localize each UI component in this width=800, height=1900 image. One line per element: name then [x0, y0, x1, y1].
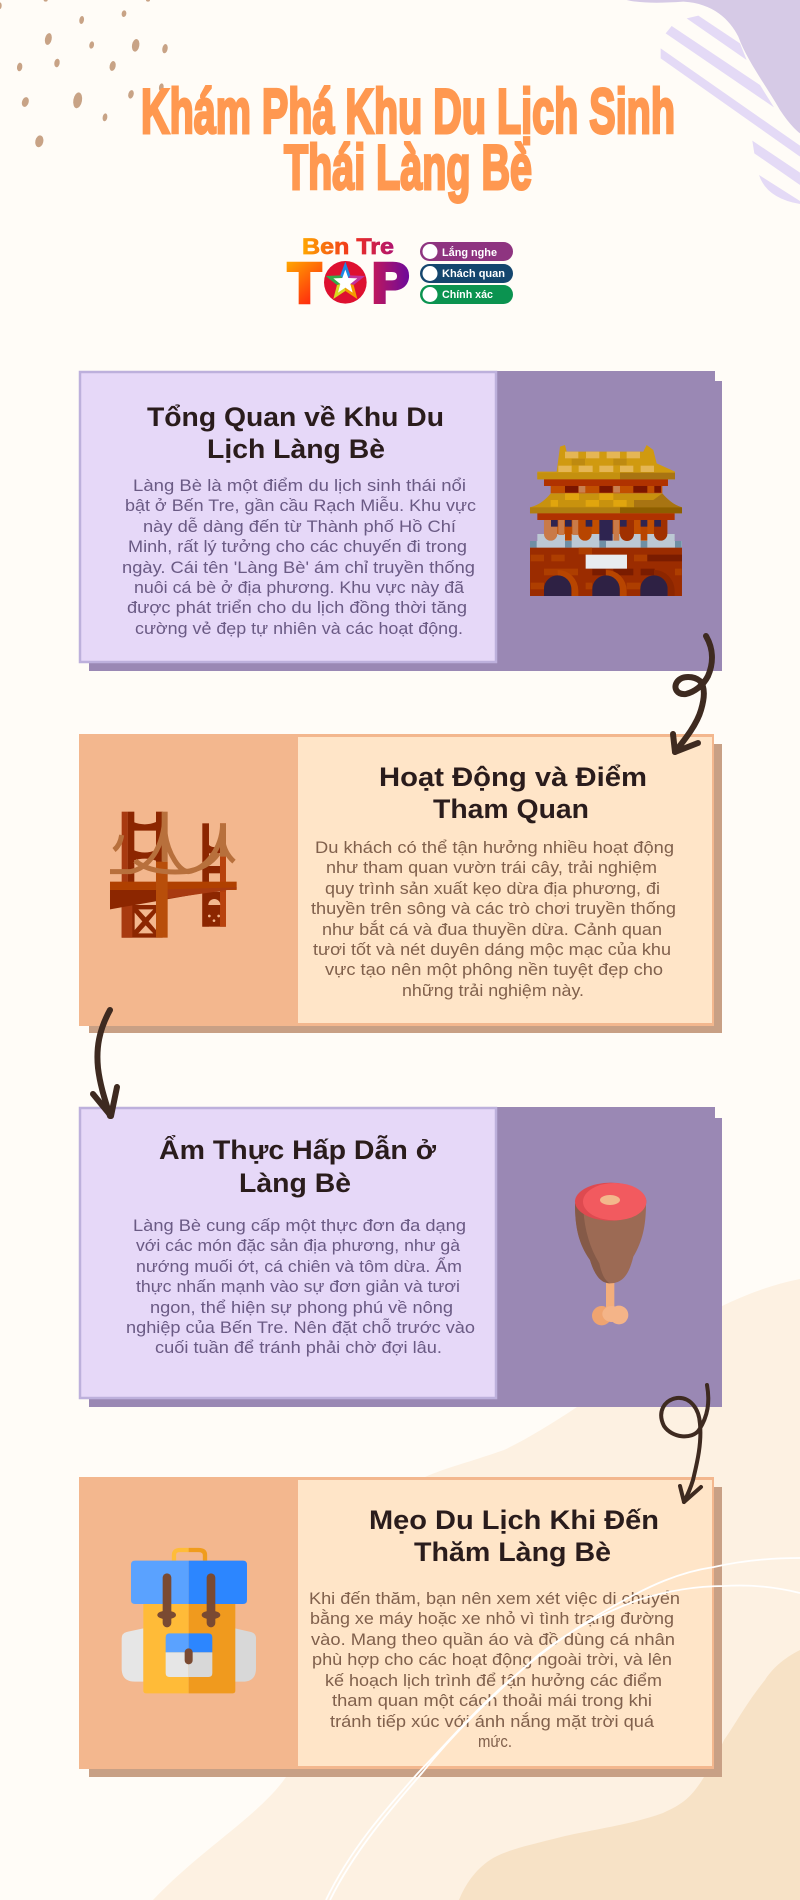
heading: Làng Bè — [239, 1168, 351, 1198]
text block: được phát triển cho du lịch đồng thời tăng — [127, 598, 467, 617]
heading — [159, 1134, 437, 1198]
icon: temple — [530, 445, 682, 596]
arrow: activities to cuisine — [93, 1010, 117, 1116]
arrow: overview to activities — [673, 636, 712, 752]
panel background — [79, 371, 722, 671]
text block: tránh tiếp xúc với ánh nắng mặt trời quá — [330, 1712, 655, 1731]
logo pill: Lắng nghe: Lắng nghe — [442, 246, 497, 259]
decoration: purple blob with stripes — [627, 0, 800, 204]
text block: như tham quan vườn trái cây, trải nghiệm — [326, 858, 657, 877]
panel: cuisine — [79, 1107, 722, 1407]
decoration: tan wave — [459, 1650, 800, 1900]
logo letter P: P — [372, 251, 409, 314]
text block: Làng Bè cung cấp một thực đơn đa dạng — [133, 1216, 466, 1235]
text block: Minh, rất lý tưởng cho các chuyến đi trong — [128, 537, 467, 556]
title: Thái Làng Bè — [284, 133, 532, 203]
text block: Du khách có thể tận hưởng nhiều hoạt động — [315, 838, 674, 857]
arrow: cuisine to tips — [661, 1385, 708, 1502]
panel background — [79, 734, 722, 1033]
text block: quy trình sản xuất kẹo dừa địa phương, đi — [325, 879, 660, 898]
text block: bật ở Bến Tre, gần cầu Rạch Miễu. Khu vực — [125, 496, 477, 515]
text block: mức. — [478, 1732, 512, 1751]
icon: bridge — [110, 812, 237, 938]
text block: với các món đặc sản địa phương, như gà — [136, 1236, 461, 1255]
heading: Ẩm Thực Hấp Dẫn ở — [159, 1134, 437, 1165]
heading — [379, 762, 647, 824]
heading — [369, 1505, 659, 1567]
heading: Thăm Làng Bè — [414, 1537, 611, 1567]
text block: Làng Bè là một điểm du lịch sinh thái nổi — [133, 476, 466, 495]
text block: như bắt cá và đua thuyền dừa. Cảnh quan — [322, 920, 662, 939]
text block: thuyền trên sông và các trò chơi truyền thống — [311, 899, 676, 918]
heading: Mẹo Du Lịch Khi Đến — [369, 1505, 659, 1535]
panel: overview — [79, 371, 722, 671]
logo: Ben Tre TOP — [288, 234, 513, 314]
heading — [147, 402, 444, 464]
text block: vực tạo nên một phông nền tuyệt đẹp cho — [325, 960, 663, 979]
panel background — [79, 1477, 722, 1777]
text block: vào. Mang theo quần áo và đồ dùng cá nhân — [311, 1630, 675, 1649]
icon: backpack — [122, 1550, 256, 1693]
heading: Lịch Làng Bè — [207, 434, 385, 464]
panel background — [79, 1107, 722, 1407]
text block: Khi đến thăm, bạn nên xem xét việc di chuyển — [309, 1589, 680, 1608]
logo pill: Chính xác: Chính xác — [442, 289, 493, 301]
logo pill: Lắng nghe — [420, 242, 513, 261]
text block: nướng muối ớt, cá chiên và tôm dừa. Ẩm — [136, 1257, 462, 1276]
text block: tham quan một cách thoải mái trong khi — [332, 1691, 652, 1710]
text block: ngon, thể hiện sự phong phú về nông — [150, 1298, 453, 1317]
text block: tươi tốt và nét duyên dáng mộc mạc của khu — [313, 940, 671, 959]
text block: nghiệp của Bến Tre. Nên đặt chỗ trước vào — [126, 1318, 475, 1337]
decoration: white curves — [326, 1558, 800, 1900]
text block: ngày. Cái tên 'Làng Bè' ám chỉ truyền thống — [122, 558, 475, 577]
logo pill: Khách quan: Khách quan — [442, 268, 505, 280]
text block: kế hoạch lịch trình để tận hưởng các điểm — [325, 1671, 662, 1690]
heading: Hoạt Động và Điểm — [379, 762, 647, 792]
logo wordmark: Ben Tre: Ben Tre — [302, 234, 394, 259]
text block: thực nhấn mạnh vào sự đơn giản và tươi — [136, 1277, 460, 1296]
text block: cuối tuần để tránh phải chờ đợi lâu. — [155, 1338, 442, 1357]
text block — [309, 1589, 680, 1751]
text block: bằng xe máy hoặc xe nhỏ vì tình trạng đường — [310, 1609, 674, 1628]
heading: Tổng Quan về Khu Du — [147, 402, 444, 432]
text block: những trải nghiệm này. — [402, 981, 584, 1000]
heading: Tham Quan — [433, 794, 589, 824]
icon: drumstick — [575, 1183, 646, 1325]
text block: này dễ dàng đến từ Thành phố Hồ Chí — [143, 517, 456, 536]
logo letter T: T — [288, 251, 321, 314]
title — [141, 77, 675, 203]
text block: nuôi cá bè ở địa phương. Khu vực này đã — [134, 578, 465, 597]
text block — [126, 1216, 475, 1357]
panel: activities — [79, 734, 722, 1033]
logo star badge — [324, 261, 367, 304]
logo pill: Khách quan — [420, 264, 513, 283]
decoration: light cream wave — [153, 1279, 800, 1900]
text block: cường vẻ đẹp tự nhiên và các hoạt động. — [135, 619, 463, 638]
text block — [311, 838, 676, 1000]
panel: travel tips — [79, 1477, 722, 1777]
text block: phù hợp cho các hoạt động ngoài trời, và lên — [312, 1650, 672, 1669]
text block — [122, 476, 477, 638]
logo pill: Chính xác — [420, 285, 513, 304]
decoration: scattered dots — [0, 0, 168, 148]
